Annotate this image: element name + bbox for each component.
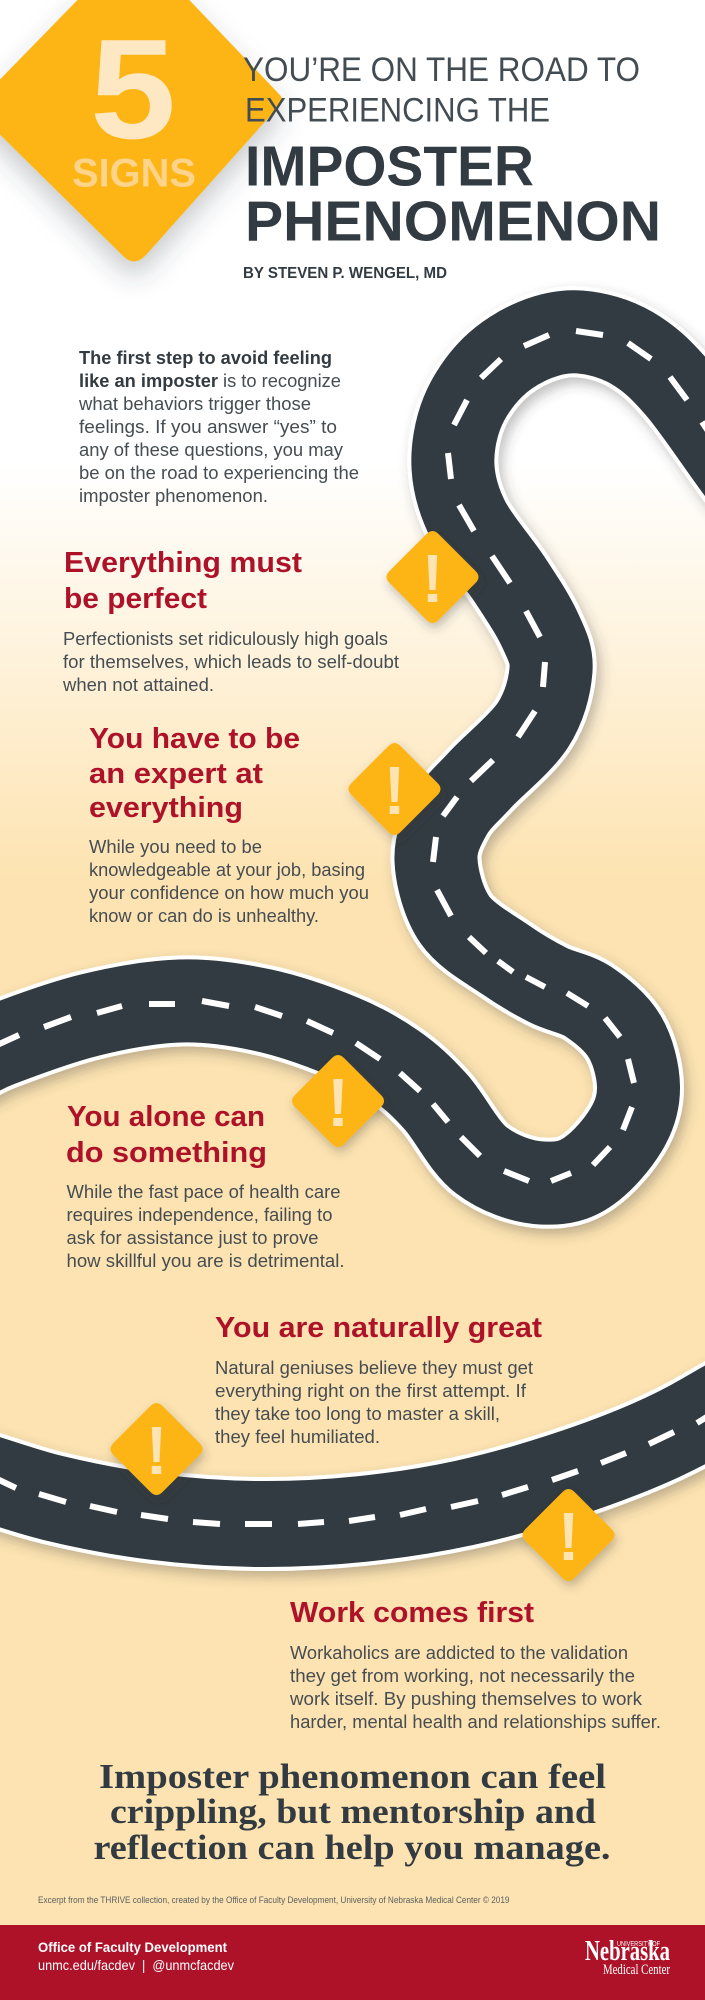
body text: Natural geniuses believe they must get	[215, 1357, 533, 1378]
logo: University of Nebraska Medical Center: Nebraska	[585, 1935, 670, 1967]
heading: everything	[89, 792, 243, 824]
body text	[89, 836, 369, 926]
sign 5: work comes first	[289, 1489, 661, 1732]
body text: when not attained.	[62, 674, 214, 695]
word signs: SIGNS	[72, 152, 196, 196]
intro text block: any of these questions, you may	[79, 439, 344, 460]
title line 1: YOU’RE ON THE ROAD TO	[243, 51, 640, 89]
icon: warning diamond	[386, 531, 478, 623]
heading: You have to be	[89, 723, 300, 755]
source note: Excerpt from the THRIVE collection, created by the Office of Faculty Development, University of Nebraska Medical Center © 2019	[38, 1895, 510, 1905]
sign 1: everything must be perfect	[62, 531, 478, 695]
heading	[66, 1101, 267, 1169]
heading: do something	[66, 1137, 267, 1169]
body text: they feel humiliated.	[215, 1426, 380, 1447]
body text: harder, mental health and relationships suffer.	[290, 1711, 661, 1732]
heading: an expert at	[89, 758, 263, 790]
body text: know or can do is unhealthy.	[89, 905, 319, 926]
heading	[89, 723, 300, 824]
icon: warning diamond	[522, 1489, 614, 1581]
road: lower road	[0, 1392, 705, 1524]
body text	[62, 628, 399, 695]
body text: Perfectionists set ridiculously high goals	[63, 628, 388, 649]
title line 3: IMPOSTER	[245, 135, 534, 199]
icon: warning diamond	[348, 743, 440, 835]
body text: knowledgeable at your job, basing	[89, 859, 365, 880]
heading: You alone can	[67, 1101, 265, 1133]
icon: large yellow diamond with 5 signs	[0, 0, 282, 262]
intro text block: feelings. If you answer “yes” to	[79, 416, 337, 437]
sign 2: expert at everything	[89, 723, 440, 926]
sign 4: you are naturally great	[110, 1312, 542, 1495]
body text: Workaholics are addicted to the validation	[290, 1642, 628, 1663]
road: winding upper road	[0, 331, 705, 1183]
title	[243, 51, 661, 282]
footer band	[0, 1925, 705, 2000]
intro text block: what behaviors trigger those	[78, 393, 311, 414]
body text: While the fast pace of health care	[66, 1181, 340, 1202]
body text: for themselves, which leads to self-doubt	[63, 651, 399, 672]
body text	[289, 1642, 661, 1732]
body text: While you need to be	[89, 836, 262, 857]
closing statement	[94, 1757, 610, 1867]
closing statement: crippling, but mentorship and	[110, 1792, 597, 1831]
body text	[215, 1357, 533, 1447]
heading	[64, 547, 302, 615]
intro text block: is to recognize	[223, 370, 341, 391]
body text: your confidence on how much you	[89, 882, 369, 903]
icon: warning diamond	[110, 1403, 202, 1495]
title line 2: EXPERIENCING THE	[245, 92, 550, 130]
intro text block: like an imposter	[79, 370, 218, 391]
heading: Work comes first	[290, 1597, 534, 1629]
footer office name: Office of Faculty Development	[38, 1939, 227, 1955]
body text: everything right on the first attempt. If	[215, 1380, 527, 1401]
body text: how skillful you are is detrimental.	[66, 1250, 344, 1271]
heading: Everything must	[64, 547, 302, 579]
intro text block: imposter phenomenon.	[79, 485, 268, 506]
body text	[66, 1181, 344, 1271]
logo: University of Nebraska Medical Center: UNIVERSITY OF	[617, 1941, 660, 1948]
body text: they get from working, not necessarily the	[290, 1665, 635, 1686]
intro text block	[78, 347, 359, 506]
body text: ask for assistance just to prove	[66, 1227, 318, 1248]
heading: be perfect	[64, 583, 207, 615]
number 5: 5	[90, 10, 176, 169]
intro text block: The first step to avoid feeling	[79, 347, 332, 368]
body text: work itself. By pushing themselves to work	[289, 1688, 643, 1709]
body text: they take too long to master a skill,	[215, 1403, 500, 1424]
sign 3: you alone can do something	[66, 1055, 384, 1271]
byline: BY STEVEN P. WENGEL, MD	[243, 265, 447, 282]
closing statement: reflection can help you manage.	[94, 1828, 610, 1867]
logo: University of Nebraska Medical Center	[585, 1935, 670, 1978]
icon: warning diamond	[292, 1055, 384, 1147]
body text: requires independence, failing to	[66, 1204, 332, 1225]
intro text block: be on the road to experiencing the	[79, 462, 359, 483]
heading: You are naturally great	[215, 1312, 542, 1344]
footer links: unmc.edu/facdev | @unmcfacdev	[38, 1957, 234, 1973]
title line 4: PHENOMENON	[245, 190, 661, 254]
logo: University of Nebraska Medical Center: Medical Center	[603, 1962, 670, 1978]
closing statement: Imposter phenomenon can feel	[99, 1757, 606, 1796]
